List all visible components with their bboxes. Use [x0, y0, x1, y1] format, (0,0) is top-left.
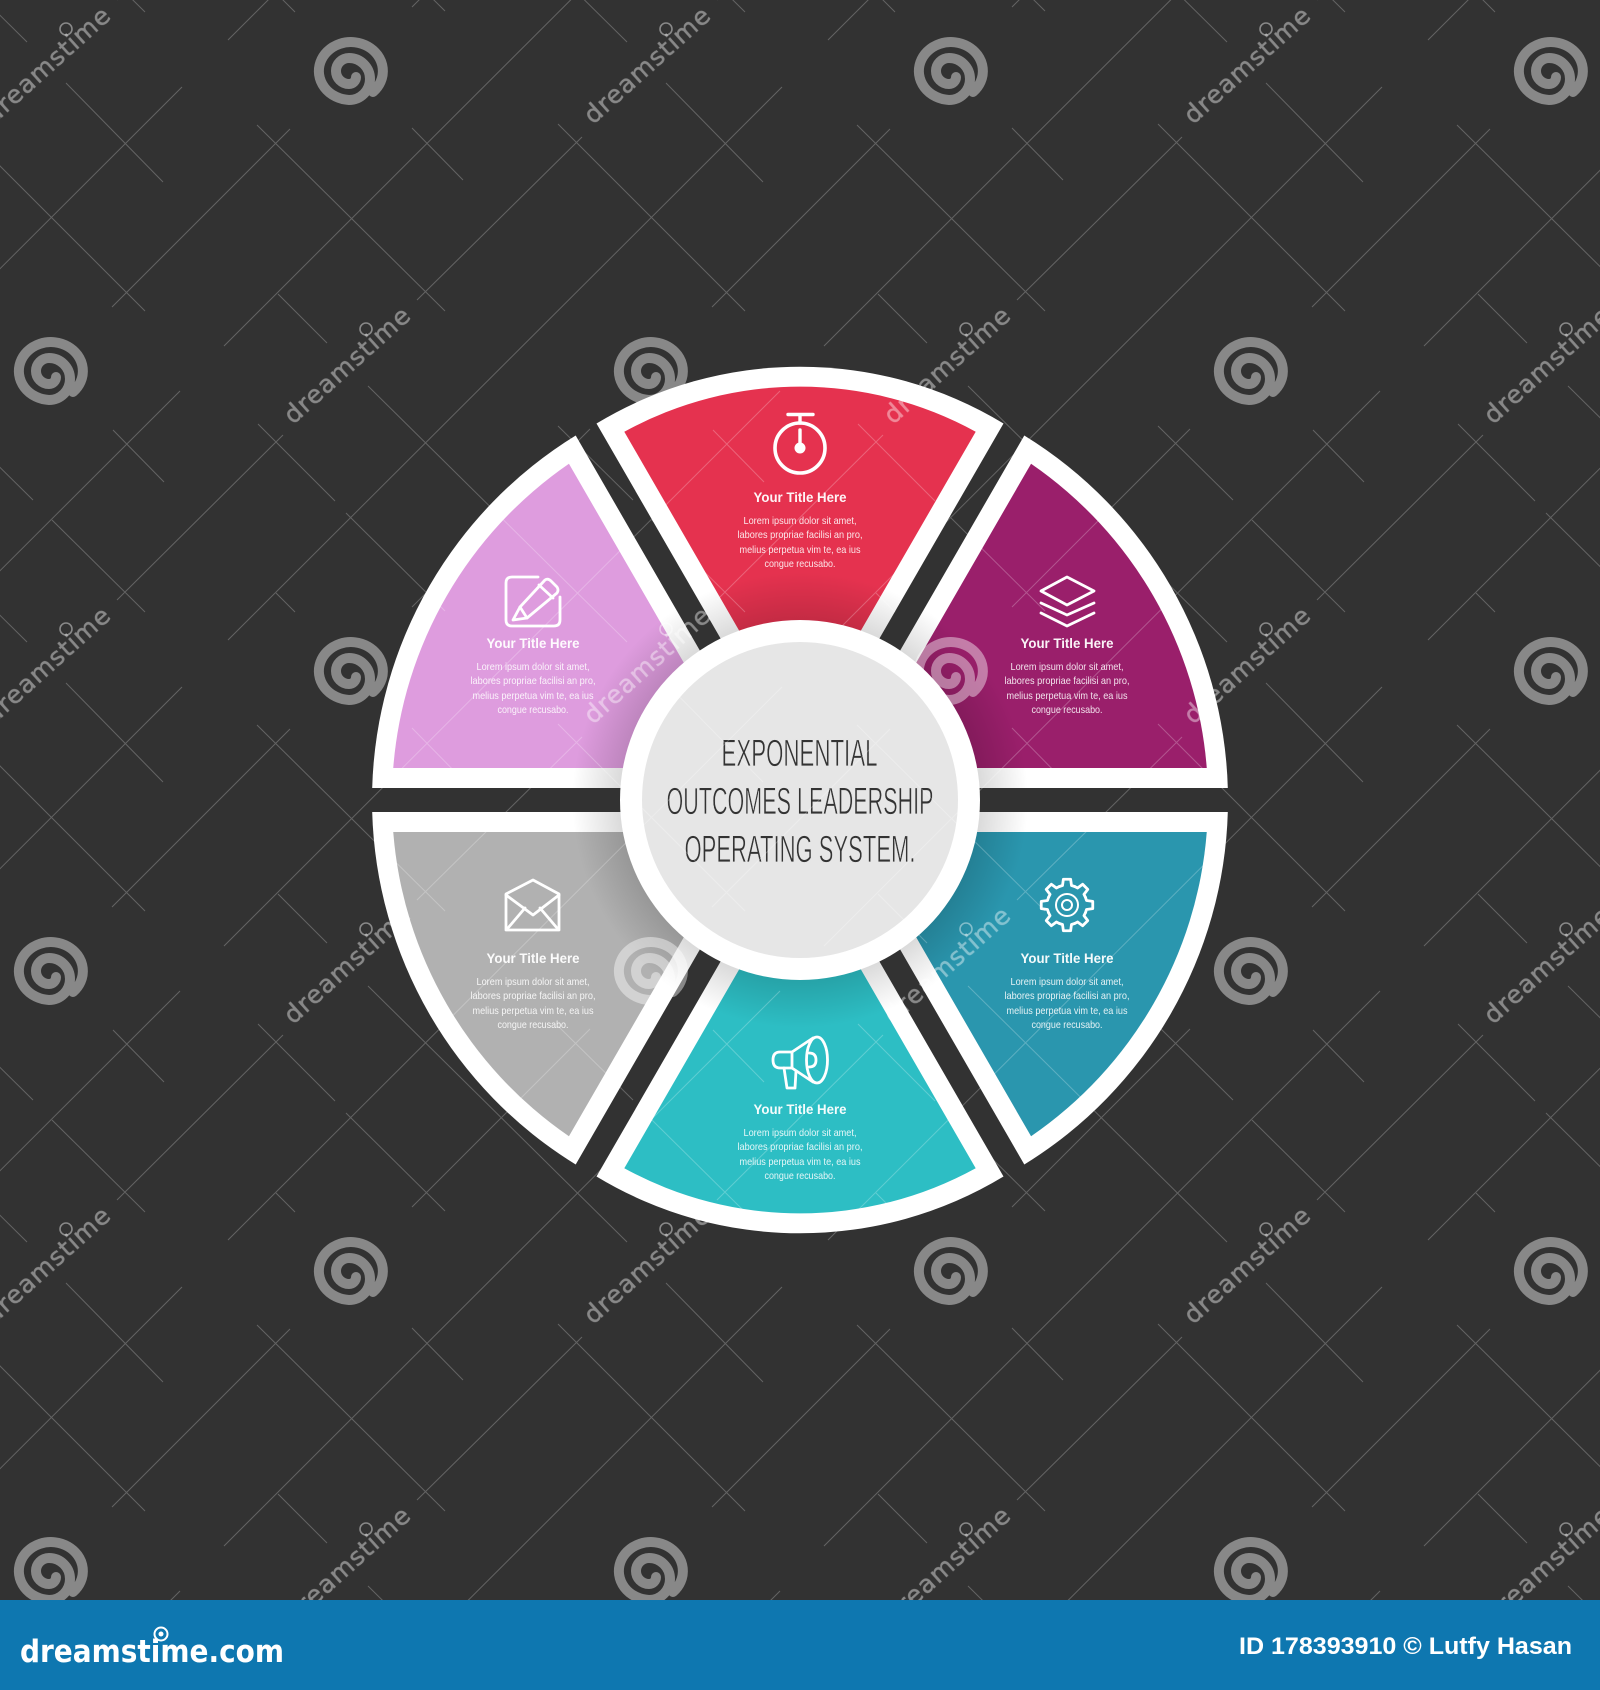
panel: blue gear segment: [719, 636, 1272, 1190]
panel: cyan megaphone segment: [596, 824, 1004, 1233]
panel: purple layers segment: [719, 410, 1272, 964]
text: grey segment: Your Title Here: [486, 950, 580, 966]
panel: pink pencil segment: [328, 410, 881, 964]
panel: red stopwatch segment: [596, 367, 1004, 776]
watermark: dreamstime text: dreamstime: [878, 301, 1016, 430]
watermark: dreamstime text: dreamstime: [278, 301, 416, 430]
icon: stopwatch: [775, 414, 825, 473]
text: cyan segment: Your Title Here: [754, 1101, 847, 1117]
watermark: dreamstime text: dreamstime: [1178, 601, 1316, 730]
text: red segment: Your Title Here: [754, 489, 847, 505]
footer logo text: dreamstime.com: [20, 1634, 284, 1670]
icon: layers: [1041, 577, 1094, 626]
text: red segment: labores propriae facilisi an pro,: [738, 529, 862, 541]
text: red segment: [738, 489, 862, 570]
text: pink segment: Lorem ipsum dolor sit amet,: [476, 661, 590, 673]
text: blue segment: melius perpetua vim te, ea ius: [1006, 1005, 1128, 1017]
text: purple segment: congue recusabo.: [1032, 704, 1102, 716]
center shadow on segments: [584, 584, 1016, 1014]
icon: envelope: [506, 880, 559, 930]
text: red segment: congue recusabo.: [764, 558, 836, 570]
text: cyan segment: Lorem ipsum dolor sit amet,: [744, 1127, 856, 1139]
text: grey segment: Lorem ipsum dolor sit amet,: [476, 976, 590, 988]
center title text: EXPONENTIAL: [722, 733, 878, 775]
text: blue segment: congue recusabo.: [1032, 1019, 1102, 1031]
footer bar: [0, 1600, 1600, 1690]
text: cyan segment: [738, 1101, 862, 1182]
watermark: dreamstime text: dreamstime: [878, 901, 1016, 1030]
text: pink segment: congue recusabo.: [498, 704, 568, 716]
footer credit text: ID 178393910 © Lutfy Hasan: [1239, 1633, 1572, 1660]
watermark: dreamstime text: dreamstime: [578, 601, 716, 730]
watermark: dreamstime text: dreamstime: [578, 1201, 716, 1330]
text: pink segment: melius perpetua vim te, ea ius: [472, 690, 594, 702]
text: grey segment: labores propriae facilisi an pro,: [470, 990, 596, 1002]
text: blue segment: labores propriae facilisi an pro,: [1004, 990, 1130, 1002]
text: blue segment: Your Title Here: [1020, 950, 1114, 966]
watermark: dreamstime text: dreamstime: [278, 1501, 416, 1630]
text: blue segment: [1004, 950, 1130, 1031]
text: pink segment: labores propriae facilisi an pro,: [470, 675, 596, 687]
text: cyan segment: melius perpetua vim te, ea ius: [740, 1156, 860, 1168]
icon: pencil in square: [506, 577, 560, 626]
text: pink segment: Your Title Here: [486, 635, 580, 651]
text: purple segment: labores propriae facilisi an pro,: [1004, 675, 1130, 687]
watermark: dreamstime text: dreamstime: [878, 1501, 1016, 1630]
watermark: dreamstime text: dreamstime: [578, 1, 716, 130]
text: cyan segment: labores propriae facilisi an pro,: [738, 1141, 862, 1153]
text: purple segment: [1004, 635, 1130, 716]
text: red segment: melius perpetua vim te, ea ius: [740, 544, 860, 556]
text: grey segment: congue recusabo.: [498, 1019, 568, 1031]
text: cyan segment: congue recusabo.: [764, 1170, 836, 1182]
text: grey segment: melius perpetua vim te, ea ius: [472, 1005, 594, 1017]
center title text: OUTCOMES LEADERSHIP: [666, 781, 934, 823]
text: pink segment: [470, 635, 596, 716]
text: grey segment: [470, 950, 596, 1031]
watermark: dreamstime text: dreamstime: [1178, 1201, 1316, 1330]
watermark: dreamstime text: dreamstime: [278, 901, 416, 1030]
center circle: [620, 620, 980, 980]
text: blue segment: Lorem ipsum dolor sit amet,: [1010, 976, 1124, 988]
text: purple segment: melius perpetua vim te, ea ius: [1006, 690, 1128, 702]
text: red segment: Lorem ipsum dolor sit amet,: [744, 515, 856, 527]
icon: megaphone: [773, 1037, 828, 1088]
text: purple segment: Lorem ipsum dolor sit amet,: [1010, 661, 1124, 673]
icon: gear: [1041, 879, 1093, 931]
center title text: [666, 733, 934, 871]
text: purple segment: Your Title Here: [1020, 635, 1114, 651]
panel: grey envelope segment: [328, 636, 881, 1190]
watermark: dreamstime text: dreamstime: [1178, 1, 1316, 130]
center title text: OPERATING SYSTEM.: [684, 829, 916, 871]
